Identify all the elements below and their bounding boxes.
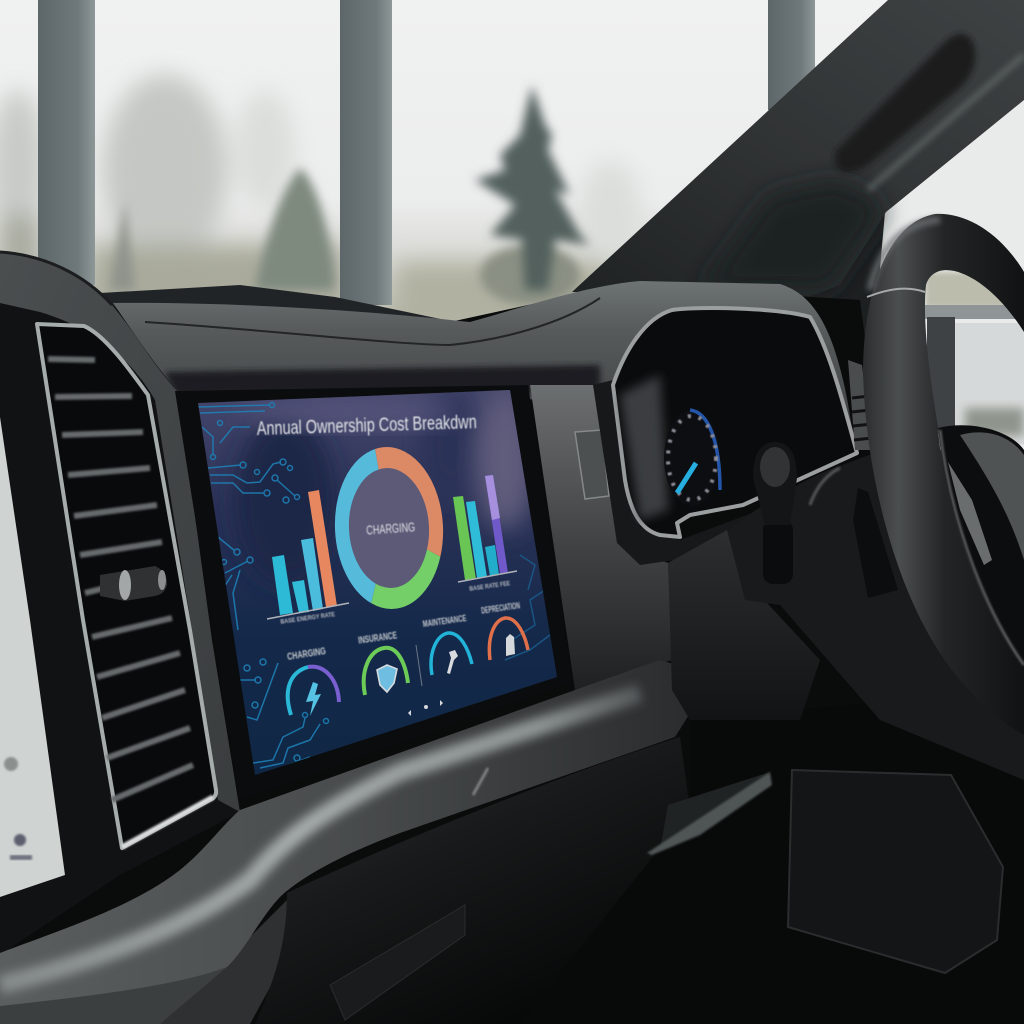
icon: lightning bolt [306,682,321,716]
icon: shield [377,665,397,692]
stalk cap [760,447,790,487]
left hood [0,252,240,812]
background: blurred trees [0,75,640,332]
gauge: depreciation [481,600,528,660]
gauge: maintenance [422,613,472,675]
scuff mark [473,768,488,795]
dashboard base [0,285,1024,1024]
gauge: charging: CHARGING [286,646,327,663]
silver dash trim band [0,660,692,1006]
left bar chart: BASE ENERGY RATE [280,611,336,626]
horizon through wheel [925,272,1024,308]
side vent [848,360,872,450]
speedometer [664,410,720,506]
left air vent [37,324,216,848]
infotainment display [198,390,557,775]
left white display [0,417,65,897]
visor grip recess [835,34,975,172]
column shroud panel [668,530,820,720]
wheel buttons [948,462,992,565]
steering hub housing [727,452,1024,780]
paddle [853,488,898,598]
cluster left display [620,375,668,520]
pillar dark lower [700,180,885,290]
pagination arrows [408,700,443,716]
instrument cluster [593,308,857,565]
donut chart [338,455,440,601]
left black vent surround [0,303,240,955]
rim top highlight [870,220,940,290]
bottom right hexagonal cover [788,770,1003,973]
hazard switch [575,430,609,499]
cluster dark rim [593,380,760,565]
pillar behind cluster [790,212,885,360]
wiper strip [100,285,455,328]
turn stalk [753,442,797,584]
gauge: charging [286,646,339,716]
lower left gray section [0,967,227,1024]
grab handle [647,772,772,855]
title: Annual Ownership Cost Breakdwn [256,412,477,440]
background: sky through window [0,0,1024,330]
brushed centre panel [530,385,672,690]
right bar chart: BASE RATE FEE [469,581,511,593]
gauge: insurance: INSURANCE [358,630,398,647]
hood top edge [0,252,112,305]
right bar chart [453,475,517,593]
housing lit rim [810,468,840,505]
screen recess shadow [165,365,600,395]
vent bottom chrome [122,797,213,847]
side mirror [925,305,1024,445]
upper dash surface [113,281,855,450]
right side window [880,100,1024,450]
pillar lit rim [868,55,1024,190]
lower dark footwell [520,700,1024,1024]
vent adjuster knob [100,566,167,601]
lower left dash panel [0,900,287,1024]
vent slats [48,359,193,800]
circuit board traces [198,402,550,768]
donut centre label: CHARGING [366,520,416,538]
wheel hub [938,425,1024,730]
dash seam [145,298,600,345]
divider [416,645,422,686]
rim seam [867,289,925,297]
gauge: maintenance: MAINTENANCE [422,613,467,630]
rim inner edge light [940,430,1024,665]
gauge: depreciation: DEPRECIATION [481,600,521,616]
trim highlight [0,693,640,985]
glovebox panel [255,737,690,1024]
gauge: insurance [358,630,408,695]
icon: depreciation badge [506,634,515,656]
A-pillar and visor [572,0,1024,300]
left bar chart [267,490,349,626]
display bezel [175,385,572,800]
screen reflections [235,390,535,585]
steering wheel rim [863,214,1024,735]
icon: wrench [447,650,458,674]
window pillars [38,0,815,305]
glovebox latch [330,905,465,1020]
cluster chrome frame and screen [613,308,857,537]
